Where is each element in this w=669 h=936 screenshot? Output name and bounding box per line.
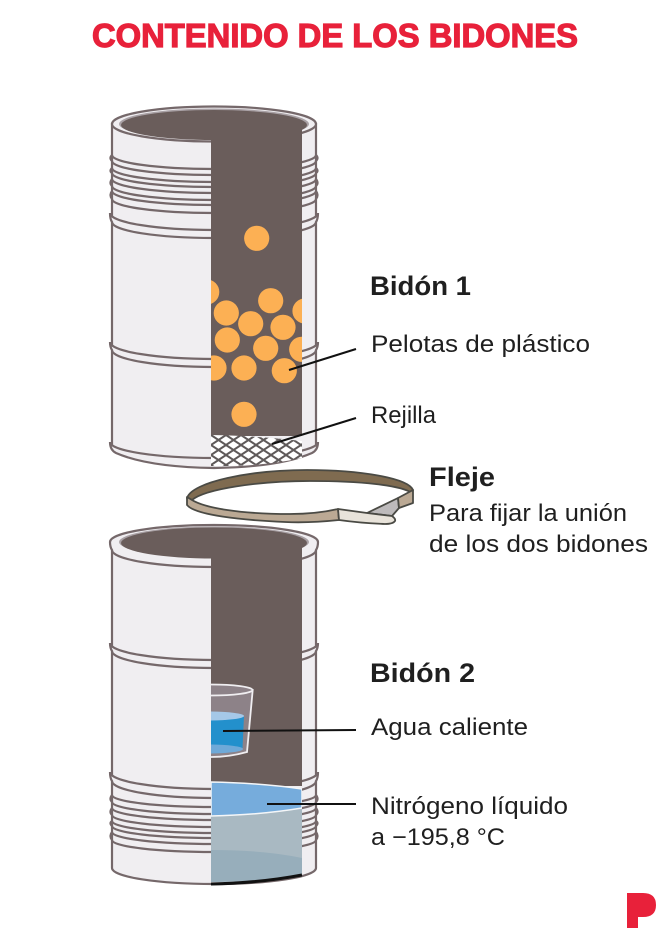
label: Rejilla: Rejilla: [371, 402, 437, 429]
barrel 1 upper band: [110, 213, 318, 238]
barrel 1 middle band: [110, 342, 318, 367]
strap front band: [187, 497, 339, 522]
barrel 1 upper ribs: [110, 155, 318, 213]
strap tail: [338, 509, 395, 524]
leader lines: [223, 349, 356, 804]
label: liquid nitrogen: a −195,8 °C: [371, 824, 505, 851]
label: liquid nitrogen: [371, 793, 568, 851]
barrel 1 cutaway interior: [211, 128, 302, 436]
barrel 2 lower band: [110, 772, 318, 798]
strap buckle: [367, 498, 399, 516]
barrel 2 top rim: [110, 525, 318, 567]
plastic balls: [211, 226, 302, 427]
title: CONTENIDO DE LOS BIDONES: [92, 17, 578, 54]
barrel 2 lower ribs: [110, 795, 318, 852]
label: Fleje: Fleje: [429, 462, 495, 492]
label: Bidón 1: Bidón 1: [370, 271, 471, 301]
label: strap description: Para fijar la unión: [429, 500, 627, 527]
barrel 2 upper band: [110, 643, 318, 668]
barrel 1 body: [112, 124, 316, 461]
strap right end: [398, 490, 413, 508]
label: strap description: de los dos bidones: [429, 531, 648, 558]
strap back band: [187, 470, 413, 500]
barrel 1 top rim: [112, 106, 316, 142]
barrel 1 bottom band: [110, 442, 318, 468]
label: Pelotas de plástico: Pelotas de plástico: [371, 331, 590, 358]
barrel 2: [110, 525, 318, 884]
barrel 2 body: [112, 545, 316, 884]
label: Agua caliente: Agua caliente: [371, 714, 528, 741]
barrel 2 cutaway interior: [211, 546, 302, 786]
mesh grid: [211, 435, 302, 466]
label: liquid nitrogen: Nitrógeno líquido: [371, 793, 568, 820]
label: Bidón 2: Bidón 2: [370, 658, 475, 688]
glass of hot water: [211, 684, 254, 758]
label: strap description: [429, 500, 648, 558]
liquid nitrogen: [211, 782, 302, 884]
barrel 1: [110, 106, 318, 468]
logo: [627, 893, 656, 928]
strap: [187, 470, 413, 524]
